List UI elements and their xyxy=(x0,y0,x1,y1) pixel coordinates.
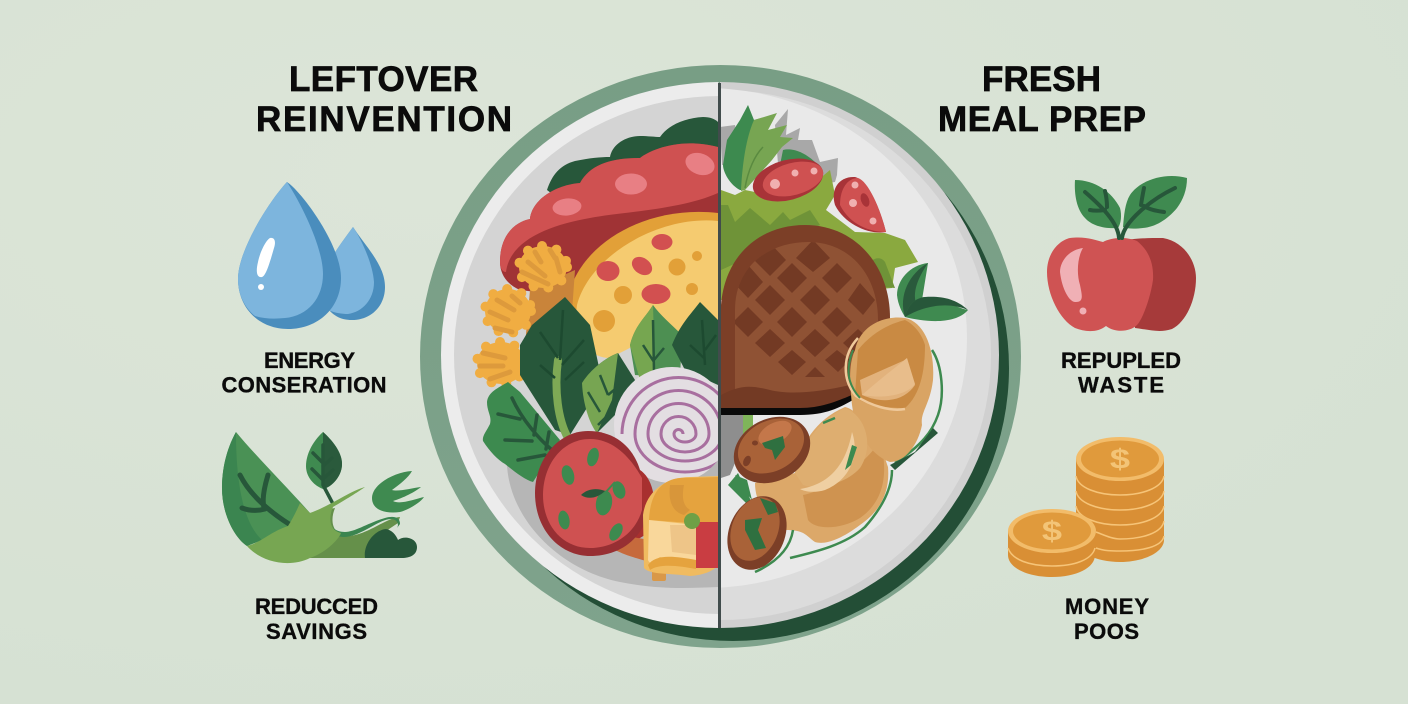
icon: apple xyxy=(1047,176,1196,331)
right half of plate xyxy=(720,82,999,628)
label: energy conservation: CONSERATION xyxy=(222,372,386,398)
label: reduced savings: SAVINGS xyxy=(266,619,367,644)
gray block under patty xyxy=(721,415,743,478)
title: fresh meal prep xyxy=(938,60,1146,139)
waffle patty xyxy=(721,225,890,408)
label: reduced savings: REDUCCED xyxy=(255,594,378,619)
label: energy conservation: ENERGY xyxy=(264,348,355,373)
onion slice xyxy=(614,367,718,482)
label: repupled waste xyxy=(1061,348,1181,398)
red sauce blob xyxy=(500,143,718,300)
cheese round xyxy=(567,212,718,358)
plate shadow xyxy=(507,460,718,588)
center divider xyxy=(718,83,721,628)
back dark leaves xyxy=(547,117,718,200)
title: leftover reinvention xyxy=(256,60,512,139)
label: money poos: MONEY xyxy=(1065,594,1149,619)
salad leaves xyxy=(483,297,718,482)
outer ring xyxy=(420,65,1021,648)
title: leftover reinvention: LEFTOVER xyxy=(289,60,478,99)
title: fresh meal prep: FRESH xyxy=(982,60,1101,99)
potatoes xyxy=(755,317,942,558)
label: energy conservation xyxy=(222,348,386,398)
plate illustration xyxy=(420,65,1021,648)
cheese cube xyxy=(643,476,720,581)
icon: water drops xyxy=(238,182,385,329)
label: repupled waste: WASTE xyxy=(1078,372,1164,398)
icon: coin stacks xyxy=(1008,437,1164,577)
sausage coin slices xyxy=(727,416,810,574)
label: money poos xyxy=(1065,594,1149,644)
pasta shells xyxy=(477,246,575,384)
gray shards xyxy=(721,109,838,182)
top leaves xyxy=(723,105,816,191)
title: fresh meal prep: MEAL PREP xyxy=(938,100,1146,139)
label: reduced savings xyxy=(255,594,378,644)
black base line xyxy=(721,395,856,415)
icon: coin stacks: $ xyxy=(1110,444,1130,474)
label: money poos: POOS xyxy=(1074,619,1139,644)
label: repupled waste: REPUPLED xyxy=(1061,348,1181,373)
left half of plate xyxy=(441,82,718,628)
tomato slice xyxy=(535,431,654,562)
icon: leaves and fork xyxy=(222,432,424,563)
title: leftover reinvention: REINVENTION xyxy=(256,100,512,139)
sausage slices xyxy=(752,158,886,232)
garnish leaf xyxy=(897,263,968,321)
icon: coin stacks: $ xyxy=(1042,516,1062,546)
dark crescent shadow xyxy=(457,95,1009,641)
green salad mass xyxy=(721,170,918,300)
